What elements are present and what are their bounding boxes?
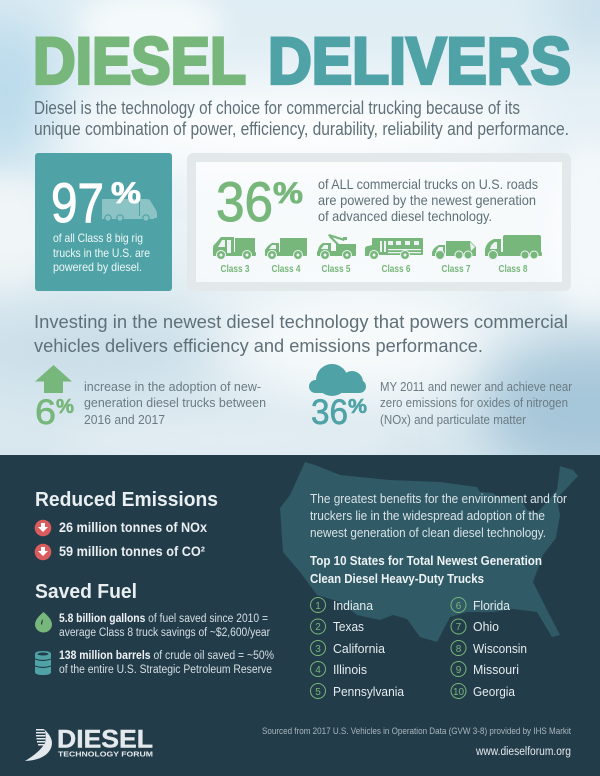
logo wordmark: DIESEL xyxy=(57,726,153,754)
97 percent description: of all Class 8 big rig xyxy=(53,231,143,245)
heading: reduced emissions: Reduced Emissions xyxy=(35,489,218,511)
state names: Illinois xyxy=(333,662,367,677)
6 percent figure xyxy=(35,393,74,432)
state names: Wisconsin xyxy=(473,641,527,656)
label: class 6: Class 6 xyxy=(382,263,411,275)
36 percent description: are powered by the newest generation xyxy=(318,192,536,208)
label: class 4: Class 4 xyxy=(272,263,301,275)
section heading: investing: vehicles delivers efficiency and emissions performance. xyxy=(34,335,483,356)
icon: cloud xyxy=(309,364,366,396)
36 percent small figure: 36 xyxy=(311,393,348,432)
36 percent figure: % xyxy=(273,177,303,210)
state names: Texas xyxy=(333,619,364,634)
97 percent description xyxy=(53,231,150,274)
6 percent description: increase in the adoption of new- xyxy=(84,380,261,394)
97 percent description: powered by diesel. xyxy=(53,260,142,274)
heading: saved fuel: Saved Fuel xyxy=(35,581,137,603)
map of the United States xyxy=(280,462,578,642)
benefits text: The greatest benefits for the environment and for xyxy=(310,491,568,506)
badge numbers xyxy=(315,601,464,698)
icon: class 3 truck xyxy=(213,237,256,260)
gallons text: 5.8 billion gallons of fuel saved since 2010 = xyxy=(59,613,268,625)
title xyxy=(33,24,571,98)
36 percent small description: MY 2011 and newer and achieve near xyxy=(380,380,572,394)
badge numbers: 2 xyxy=(315,622,321,633)
6 percent description: generation diesel trucks between xyxy=(84,396,266,410)
icon: fuel drop xyxy=(35,612,52,632)
CO2 figure: 59 million tonnes of CO² xyxy=(59,544,205,559)
state names: Georgia xyxy=(473,684,516,699)
icon: oil barrel xyxy=(35,651,51,675)
list: top 10 states xyxy=(310,598,527,699)
36 percent small description: (NOx) and particulate matter xyxy=(380,413,526,427)
NOx figure: 26 million tonnes of NOx xyxy=(59,520,207,535)
badge numbers: 1 xyxy=(315,601,321,612)
panel: 36 percent of all trucks xyxy=(192,158,566,286)
state names: Missouri xyxy=(473,662,519,677)
section heading: investing: Investing in the newest diesel technology that powers commercial xyxy=(34,311,568,332)
badge numbers: 3 xyxy=(315,644,321,655)
6 percent description: 2016 and 2017 xyxy=(84,413,165,427)
logo: Diesel Technology Forum xyxy=(25,726,153,761)
state names: Pennsylvania xyxy=(333,684,405,699)
icon: class 4 truck xyxy=(265,238,307,260)
badge numbers: 4 xyxy=(315,665,321,676)
badge numbers: 6 xyxy=(456,601,462,612)
36 percent small description: zero emissions for oxides of nitrogen xyxy=(380,396,568,410)
label: class 8: Class 8 xyxy=(498,263,528,275)
icon: red down arrow NOx xyxy=(35,520,51,536)
barrels text: 138 million barrels of crude oil saved = ~50% xyxy=(59,650,274,662)
title: DIESEL xyxy=(33,24,246,98)
icon: semi-truck xyxy=(102,199,157,221)
intro text xyxy=(34,98,569,139)
barrels text: of the entire U.S. Strategic Petroleum Reserve xyxy=(59,664,272,676)
website: www.dieselforum.org xyxy=(475,746,571,758)
benefits text: truckers lie in the widespread adoption of the xyxy=(310,508,545,523)
label: class 7: Class 7 xyxy=(442,263,471,275)
benefits text xyxy=(310,491,568,540)
dark panel xyxy=(0,455,600,776)
36 percent small description xyxy=(380,380,572,427)
icon: up arrow xyxy=(35,365,72,393)
state names: Indiana xyxy=(333,598,374,613)
36 percent description xyxy=(318,176,538,224)
6 percent description xyxy=(84,380,266,427)
number badges xyxy=(310,598,466,698)
logo subtitle: TECHNOLOGY FORUM xyxy=(58,750,153,758)
saved fuel block xyxy=(35,581,274,676)
badge numbers: 8 xyxy=(456,644,462,655)
36 percent small figure xyxy=(311,393,367,432)
icon: class 6 bus xyxy=(365,238,423,260)
36 percent description: of advanced diesel technology. xyxy=(318,208,492,224)
badge numbers: 10 xyxy=(453,687,464,698)
icon: class 8 truck xyxy=(485,235,542,260)
label: class 3: Class 3 xyxy=(220,263,250,275)
state names: Florida xyxy=(473,598,511,613)
97 percent description: trucks in the U.S. are xyxy=(53,246,150,260)
badge numbers: 7 xyxy=(456,622,462,633)
heading: top 10 states: Top 10 States for Total Newest Generation xyxy=(310,554,542,568)
stat: 6 percent increase xyxy=(35,365,266,432)
label: class 5: Class 5 xyxy=(322,263,351,275)
36 percent small figure: % xyxy=(348,396,367,418)
6 percent figure: % xyxy=(56,396,74,418)
97 percent figure: % xyxy=(111,177,141,210)
icon: class 7 truck xyxy=(432,241,476,260)
title: DELIVERS xyxy=(268,24,571,98)
badge numbers: 9 xyxy=(456,665,462,676)
intro text: Diesel is the technology of choice for commercial trucking because of its xyxy=(34,98,520,118)
panel: 97 percent xyxy=(35,153,172,291)
heading: top 10 states: Clean Diesel Heavy-Duty Trucks xyxy=(310,572,484,586)
sky background xyxy=(0,0,600,480)
gallons text xyxy=(59,613,270,639)
gallons text: average Class 8 truck savings of ~$2,600/year xyxy=(59,627,270,639)
36 percent description: of ALL commercial trucks on U.S. roads xyxy=(318,176,538,192)
barrels text xyxy=(59,650,274,676)
badge numbers: 5 xyxy=(315,687,321,698)
state names xyxy=(333,598,527,699)
reduced emissions block xyxy=(35,489,218,560)
stat: 36 percent near zero xyxy=(309,364,572,432)
6 percent figure: 6 xyxy=(35,393,56,432)
benefits text: newest generation of clean diesel technology. xyxy=(310,525,546,540)
state names: Ohio xyxy=(473,619,499,634)
36 percent figure: 36 xyxy=(216,170,273,233)
97 percent figure: 97 xyxy=(51,171,104,234)
section heading: investing xyxy=(34,311,568,356)
icon: red down arrow CO2 xyxy=(35,544,51,560)
97 percent figure xyxy=(51,171,141,234)
logo swoosh xyxy=(25,729,52,761)
icon: class 5 truck xyxy=(317,234,356,260)
state names: California xyxy=(333,641,386,656)
heading: top 10 states xyxy=(310,554,542,586)
